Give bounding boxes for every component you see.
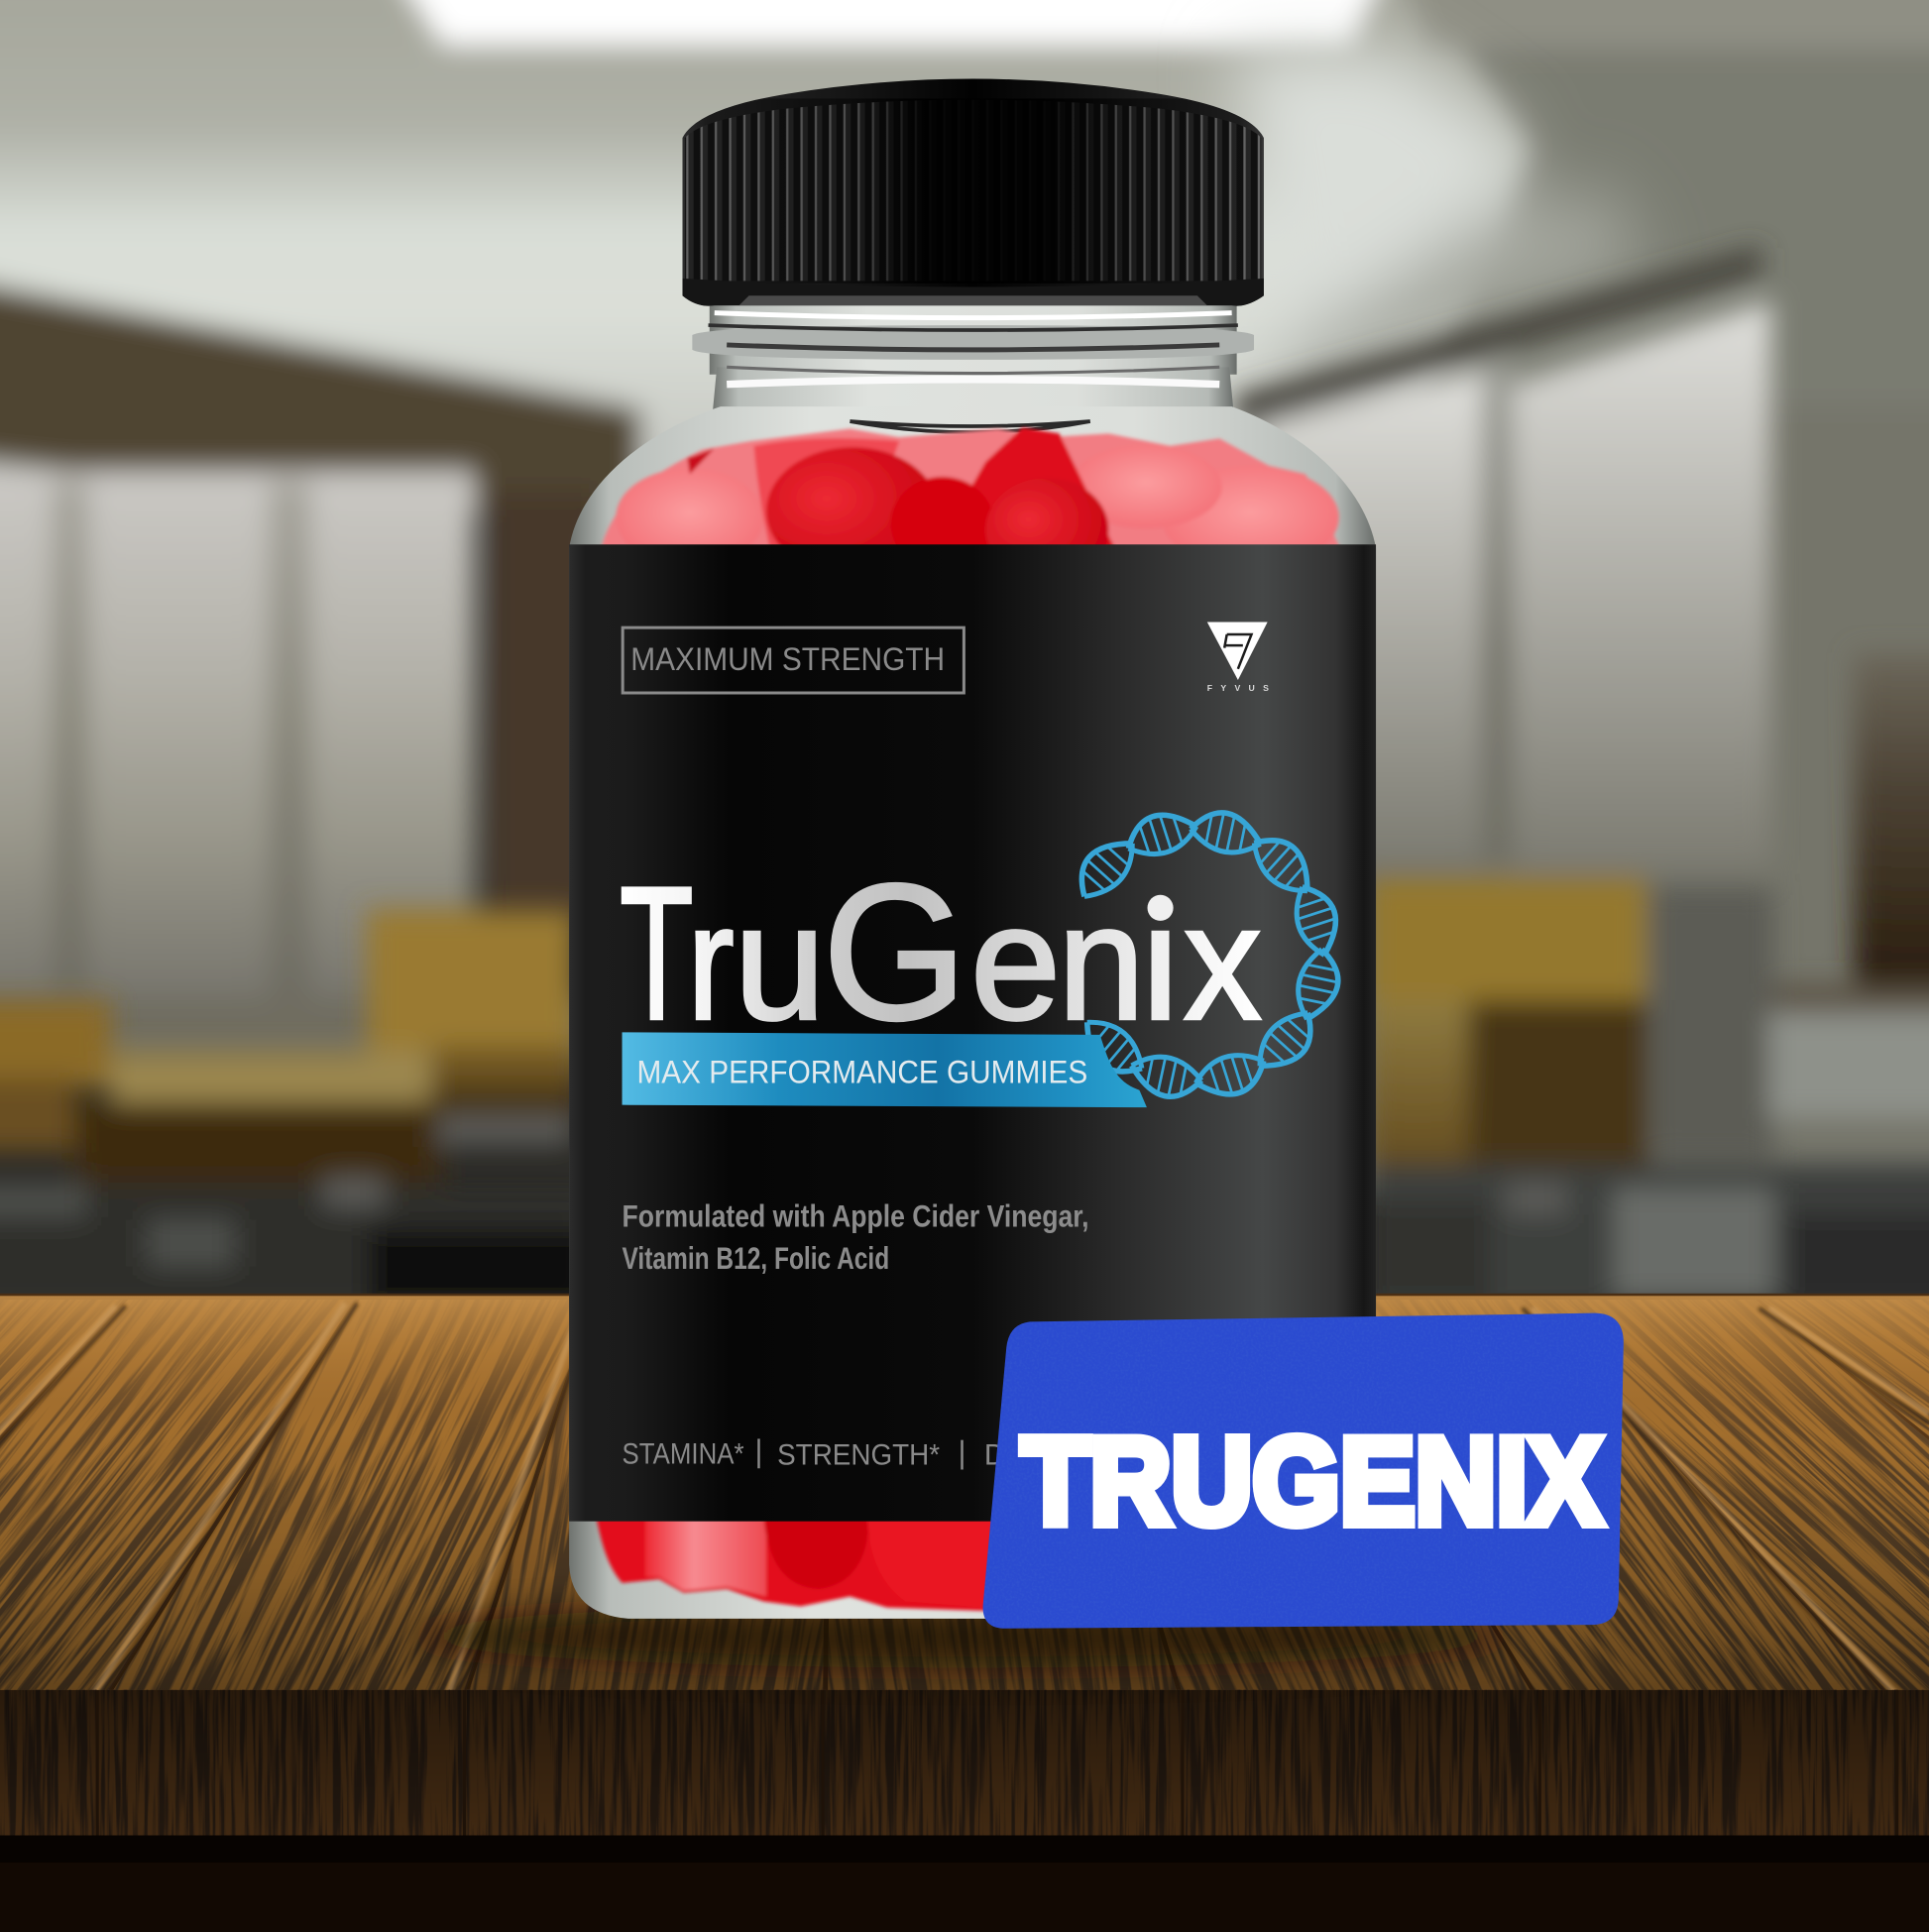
round i dot — [1148, 895, 1174, 921]
right beam — [1232, 247, 1761, 428]
table front edge — [0, 1690, 1929, 1837]
brand title: n — [1058, 871, 1144, 1055]
left window mullions — [52, 481, 88, 1010]
logo: fyvus: FYVUS — [1207, 683, 1269, 693]
benefits line — [623, 1437, 1005, 1472]
left beam — [0, 278, 640, 529]
ingredients text — [623, 1199, 1089, 1276]
card fabric texture — [993, 1318, 1600, 1622]
badge: maximum strength: MAXIMUM STRENGTH — [630, 641, 945, 677]
supplement bottle — [569, 61, 1376, 1619]
cap — [682, 79, 1264, 306]
bottle shadow on table — [406, 1604, 1515, 1668]
ingredients text: Formulated with Apple Cider Vinegar, — [623, 1199, 1089, 1234]
badge: maximum strength — [623, 627, 964, 693]
left windows — [0, 471, 474, 1012]
right window mullion — [1482, 357, 1513, 862]
table top planks — [0, 1294, 1929, 1706]
gummies top — [601, 424, 1341, 545]
plank bevel highlights — [0, 1304, 1929, 1694]
right chair back — [1367, 877, 1645, 1003]
left under-table — [74, 1102, 443, 1189]
blue brand card — [973, 1306, 1633, 1639]
benefits line: D — [984, 1439, 1005, 1472]
brand title: i — [1142, 871, 1179, 1055]
right window left panel — [1257, 370, 1482, 862]
right sofa — [1768, 1010, 1929, 1118]
floor shadow — [0, 1836, 1929, 1932]
wooden table — [0, 1294, 1929, 1932]
right lower wall — [1650, 887, 1773, 1158]
ceiling and wall — [0, 0, 1929, 493]
brand title: e — [970, 871, 1061, 1055]
left chair — [367, 909, 577, 1057]
left floor — [0, 1183, 591, 1311]
right wall — [1244, 406, 1929, 1194]
benefits line: STAMINA* — [623, 1437, 744, 1470]
shoulder inner rim — [850, 421, 1090, 432]
left table — [111, 1051, 431, 1105]
tagline band: MAX PERFORMANCE GUMMIES — [636, 1054, 1087, 1089]
right floor — [1367, 1164, 1929, 1311]
left pillar — [487, 493, 598, 924]
card wordmark: TRUGENIX — [1021, 1414, 1603, 1550]
brand title: T — [620, 848, 694, 1060]
tagline band — [623, 1032, 1147, 1107]
far left chair — [0, 1000, 111, 1086]
brand title — [620, 845, 1261, 1061]
plank joints — [0, 1304, 1929, 1694]
shoulder and glass body — [569, 406, 1376, 1619]
blurred room background — [0, 0, 1929, 1330]
ceiling light — [382, 0, 1392, 45]
brand title: r — [687, 871, 735, 1055]
right ceiling panel — [1367, 0, 1929, 517]
right window main panel — [1513, 300, 1771, 868]
soft lit wall behind bottle — [1232, 50, 1650, 406]
neck glass — [692, 300, 1254, 419]
brand title: u — [735, 871, 826, 1055]
brand title: G — [823, 845, 966, 1061]
left lower grey — [0, 998, 591, 1072]
dna ring — [1068, 806, 1345, 1103]
brand title: x — [1184, 871, 1261, 1055]
brown plant — [1854, 653, 1929, 995]
bottle label — [569, 544, 1376, 1522]
ingredients text: Vitamin B12, Folic Acid — [623, 1241, 889, 1276]
benefits line: STRENGTH* — [777, 1439, 941, 1472]
logo: fyvus — [1207, 623, 1269, 693]
gummies bottom — [596, 1518, 998, 1611]
